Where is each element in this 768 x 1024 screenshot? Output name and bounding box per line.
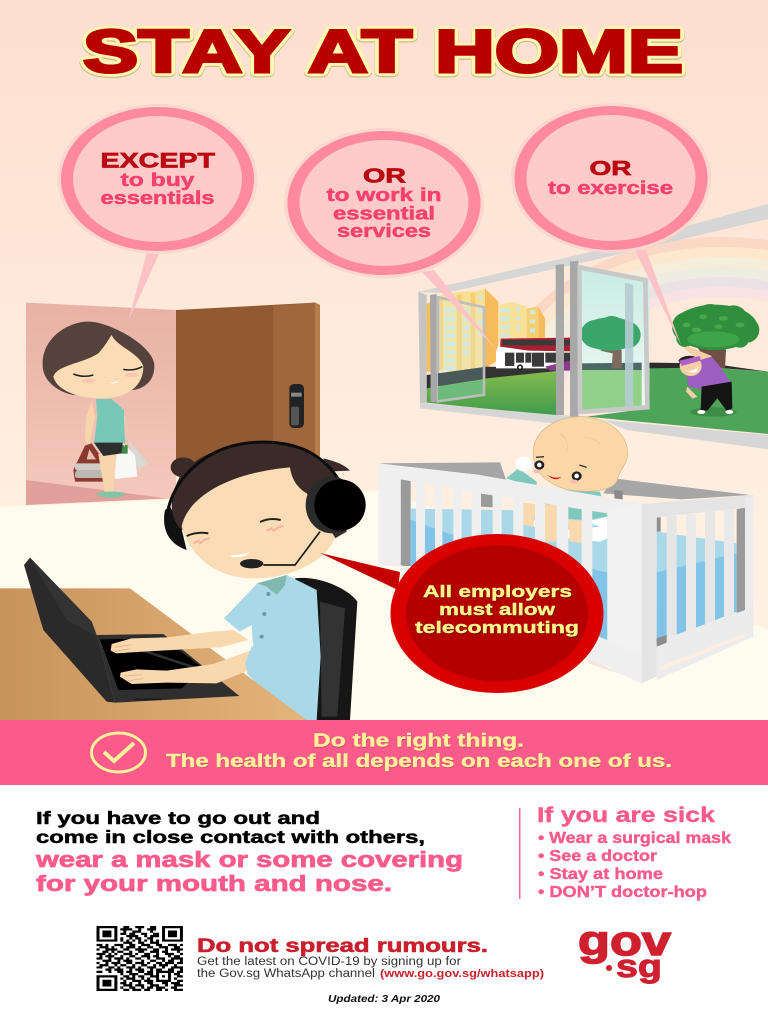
- speech bubble: except to buy essentials: [58, 104, 258, 322]
- road and lawn: [587, 363, 768, 434]
- pink message band: [0, 720, 768, 785]
- desk: [0, 588, 307, 720]
- speech bubble: except to buy essentials: to buy: [120, 170, 194, 190]
- bus: [496, 338, 570, 371]
- title: STAY AT HOME: [83, 19, 683, 86]
- icon: check mark: [92, 733, 146, 772]
- buildings: [427, 288, 545, 372]
- red telecommuting callout: All employers: [424, 583, 573, 602]
- crib front rails: [378, 463, 753, 683]
- speech bubble: or to exercise: OR: [590, 158, 632, 180]
- if you are sick list: • See a doctor: [538, 848, 657, 865]
- gov.sg logo: [578, 917, 672, 984]
- rumours notice: (www.go.gov.sg/whatsapp): [380, 968, 544, 980]
- window frame left part: [418, 261, 590, 425]
- red telecommuting callout: [320, 534, 604, 693]
- mask advice text: [35, 808, 463, 896]
- glass door: [570, 261, 649, 417]
- white lower panel: [0, 785, 768, 1024]
- rainbow: [536, 237, 768, 384]
- upper window beam: [418, 204, 768, 293]
- tree in door: [580, 316, 641, 368]
- man's head with headset: [164, 442, 366, 578]
- baby head: [533, 417, 628, 491]
- title: STAY AT HOME: [83, 18, 683, 85]
- mask advice text: If you have to go out and: [36, 808, 320, 828]
- floor: [0, 490, 768, 720]
- gov.sg logo: gov: [578, 917, 672, 964]
- woman with shopping bags: [43, 322, 154, 498]
- mask advice text: come in close contact with others,: [36, 827, 425, 847]
- rumours notice: [197, 936, 544, 980]
- if you are sick list: • Stay at home: [538, 866, 663, 883]
- pink message band: The health of all depends on each one of us.: [166, 751, 672, 771]
- gov.sg logo: sg: [616, 948, 662, 984]
- room floor: [26, 480, 167, 505]
- rumours notice: Do not spread rumours.: [197, 936, 488, 957]
- left open pane: [438, 297, 484, 401]
- updated date: Updated: 3 Apr 2020: [328, 994, 441, 1005]
- speech bubble: or to work in essential services: to work in: [326, 185, 442, 205]
- door: [176, 303, 320, 463]
- exercising man: [678, 346, 737, 417]
- door and room: [26, 303, 320, 505]
- if you are sick list: • Wear a surgical mask: [538, 830, 731, 847]
- mask advice text: for your mouth and nose.: [36, 871, 392, 896]
- speech bubble: or to exercise: to exercise: [548, 178, 673, 198]
- mask advice text: wear a mask or some covering: [35, 847, 463, 872]
- grass: [427, 371, 557, 416]
- white shopping bag: [113, 440, 148, 479]
- crib and baby: [378, 417, 753, 683]
- crib back and mattress: [378, 462, 750, 643]
- speech bubble: or to work in essential services: [284, 128, 496, 349]
- background wall: [0, 0, 768, 720]
- divider: [519, 808, 520, 899]
- speech bubble: or to work in essential services: essential: [333, 204, 435, 224]
- speech bubble: except to buy essentials: essentials: [100, 188, 214, 208]
- rumours notice: Get the latest on COVID-19 by signing up for: [197, 956, 461, 968]
- man's arms and hands: [111, 630, 280, 684]
- red telecommuting callout: telecommuting: [416, 619, 580, 638]
- baby body: [506, 457, 607, 543]
- speech bubble: or to work in essential services: services: [337, 221, 431, 241]
- pink message band: Do the right thing.: [313, 730, 524, 750]
- man's shirt: [224, 575, 321, 720]
- sill: [603, 420, 768, 449]
- speech bubble: except to buy essentials: EXCEPT: [100, 150, 215, 172]
- office chair: [295, 578, 357, 720]
- laptop: [24, 558, 239, 703]
- speech bubble: or to work in essential services: OR: [363, 166, 407, 188]
- outdoor scene right of window with exercising man: [570, 261, 768, 449]
- room behind door: [26, 303, 176, 505]
- if you are sick list: • DON’T doctor-hop: [538, 884, 707, 901]
- QR code: [96, 927, 183, 990]
- pale crib foot: [587, 658, 620, 674]
- if you are sick list: If you are sick: [537, 804, 715, 827]
- if you are sick list: [537, 804, 731, 901]
- pink message band: The health of all depends on each one of us.: [167, 752, 673, 772]
- big tree: [672, 304, 759, 368]
- window scene: [418, 261, 590, 425]
- red shopping bag: [73, 443, 107, 482]
- red telecommuting callout: must allow: [440, 601, 557, 620]
- road: [427, 367, 557, 389]
- red telecommuting callout: All employers: [423, 582, 572, 601]
- pink message band: Do the right thing.: [314, 732, 525, 752]
- title: STAY AT HOME: [83, 18, 683, 85]
- red telecommuting callout: must allow: [439, 600, 556, 619]
- speech bubble: or to exercise: [511, 103, 711, 345]
- rumours notice: the Gov.sg WhatsApp channel: [197, 968, 375, 980]
- red telecommuting callout: telecommuting: [415, 618, 579, 637]
